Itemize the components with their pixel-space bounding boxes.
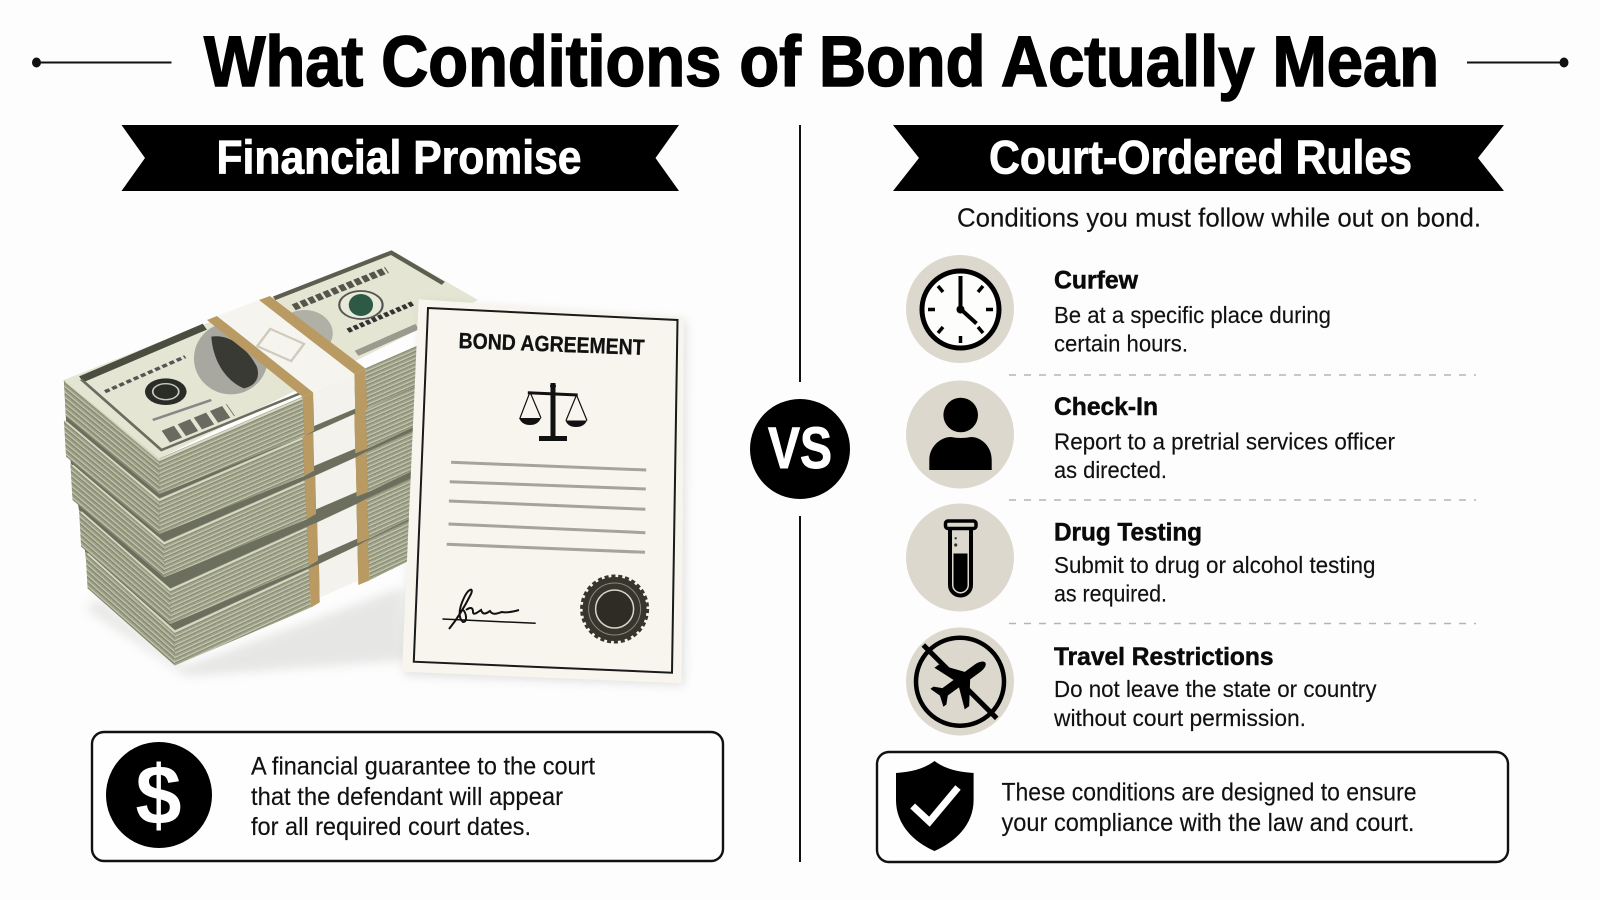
title: What Conditions of Bond Actually Mean xyxy=(204,23,1439,102)
VS badge xyxy=(750,399,850,499)
item: Curfew xyxy=(906,255,1331,363)
icon: dollar: $ xyxy=(136,748,182,842)
item: Drug Testing xyxy=(906,504,1376,612)
item text: as directed. xyxy=(1054,457,1167,483)
card text xyxy=(251,752,595,841)
card: financial guarantee xyxy=(92,732,723,861)
banner: Financial Promise xyxy=(122,125,679,191)
illustration: stacks of money xyxy=(64,250,478,677)
icon: clock xyxy=(906,255,1014,363)
item: Travel Restrictions xyxy=(906,628,1377,736)
item text: Check-In xyxy=(1054,393,1158,421)
card text: for all required court dates. xyxy=(251,813,531,841)
icon: test tube xyxy=(906,504,1014,612)
card text: that the defendant will appear xyxy=(251,783,563,811)
item text: Report to a pretrial services officer xyxy=(1054,428,1395,454)
item text: Submit to drug or alcohol testing xyxy=(1054,552,1376,578)
VS badge: VS xyxy=(768,416,832,481)
title rule left xyxy=(32,58,172,68)
item text: Drug Testing xyxy=(1054,518,1202,546)
item text: Be at a specific place during xyxy=(1054,302,1331,328)
icon: person xyxy=(906,380,1014,488)
text lines xyxy=(447,462,646,552)
title rule right xyxy=(1467,58,1568,68)
item text: without court permission. xyxy=(1053,705,1306,731)
banner: Financial Promise: Financial Promise xyxy=(216,130,582,184)
card: compliance xyxy=(877,752,1508,862)
item text: Curfew xyxy=(1054,266,1139,294)
banner: Court-Ordered Rules xyxy=(893,125,1504,191)
icon: shield check xyxy=(896,761,974,851)
subtitle: Conditions you must follow while out on bond. xyxy=(957,202,1481,232)
icon: no airplane xyxy=(906,628,1014,736)
icon: dollar xyxy=(106,742,212,848)
signature xyxy=(442,590,536,629)
center divider bottom xyxy=(799,516,801,862)
icon: scales of justice xyxy=(519,383,587,441)
item text xyxy=(1054,266,1331,356)
item text: as required. xyxy=(1054,580,1167,606)
item text xyxy=(1054,393,1395,483)
paper inner border xyxy=(414,308,678,673)
document heading: BOND AGREEMENT xyxy=(458,328,646,360)
banner: Court-Ordered Rules: Court-Ordered Rules xyxy=(989,130,1412,184)
item text: certain hours. xyxy=(1054,330,1188,356)
item text xyxy=(1053,643,1377,731)
paper sheet xyxy=(402,299,684,683)
item: Check-In xyxy=(906,380,1395,488)
illustration: bond agreement document xyxy=(402,299,686,685)
top bill xyxy=(64,250,478,458)
center divider top xyxy=(799,125,801,382)
item text: Travel Restrictions xyxy=(1054,643,1274,671)
item text xyxy=(1054,518,1376,606)
item text: Do not leave the state or country xyxy=(1054,676,1377,702)
card text xyxy=(1002,778,1416,837)
card text: A financial guarantee to the court xyxy=(251,752,595,780)
wax seal xyxy=(583,577,647,641)
card text: These conditions are designed to ensure xyxy=(1002,778,1416,806)
card text: your compliance with the law and court. xyxy=(1002,809,1414,837)
